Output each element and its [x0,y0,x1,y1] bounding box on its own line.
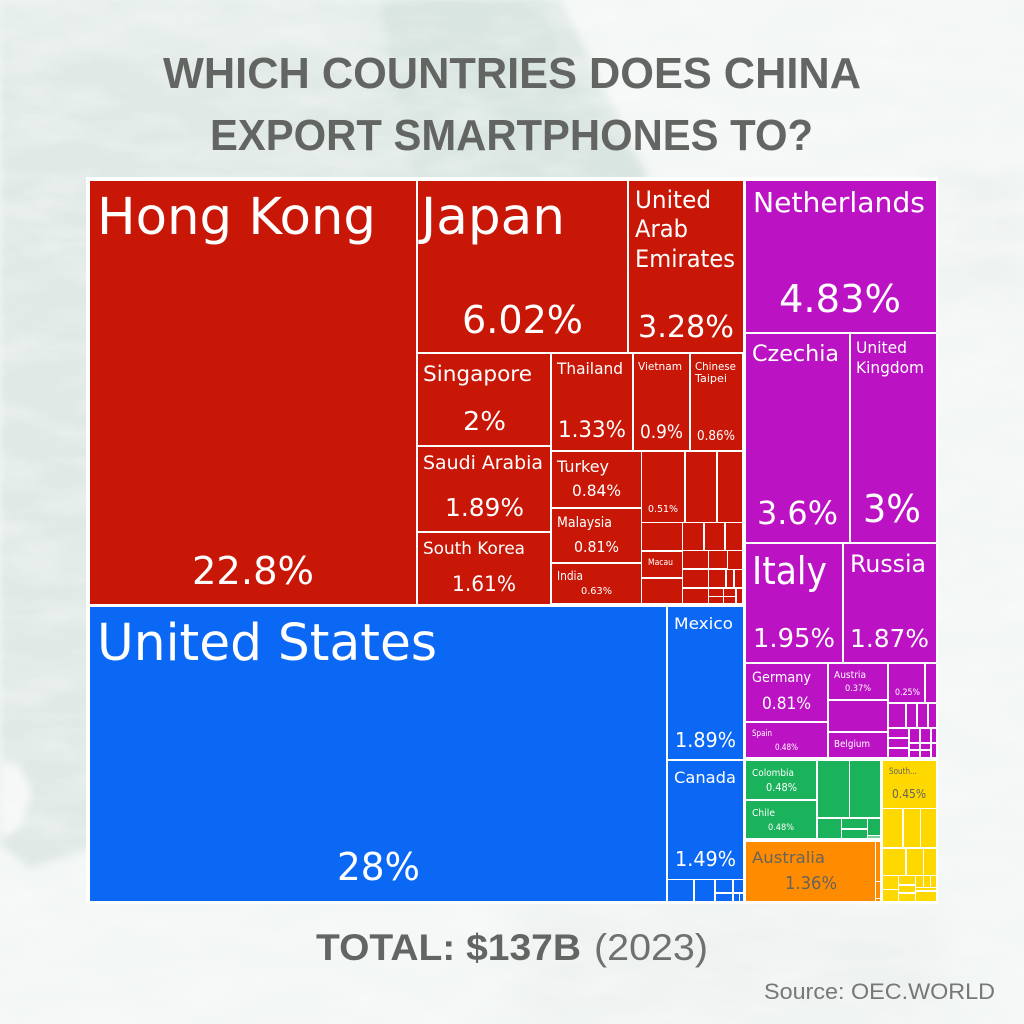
group: South America (green) [746,761,880,838]
cell: Turkey: Turkey [556,457,609,476]
cell: Singapore [418,354,550,445]
group: Africa (yellow) [883,761,936,901]
cell: Italy: Italy [752,549,827,593]
cell: India [552,564,641,603]
cell: Macau: Macau [648,558,673,568]
cell: South Africa: 0.45% [892,787,926,801]
cell: United States [90,607,666,901]
cell: Thailand: Thailand [556,359,623,378]
cell: United Arab Emirates: United [635,186,711,214]
cell: South Korea [418,533,550,604]
cell: Canada: Canada [674,768,736,787]
cell: Netherlands: Netherlands [753,186,925,219]
cell: Hong Kong [90,181,416,604]
cell: India: India [557,569,583,583]
cell: Mexico [668,607,743,759]
cell: South Korea: 1.61% [452,572,516,596]
cell: Thailand: 1.33% [558,418,626,443]
cell: United Kingdom: Kingdom [856,358,924,377]
cell: Netherlands [746,181,936,332]
cell: Germany: 0.81% [762,694,811,714]
cell: Colombia: Colombia [752,768,794,779]
cell: United Arab Emirates: Arab [635,215,688,243]
title: WHICH COUNTRIES DOES CHINA [163,49,861,98]
group: Europe (magenta) [746,181,936,757]
cell: Vietnam [634,354,689,450]
cell: Czechia: 3.6% [757,494,838,532]
cell: Russia: 1.87% [850,624,929,653]
cell: Germany [746,664,827,721]
cell: Mexico: Mexico [674,614,733,633]
cell: Spain [746,723,827,757]
cell: Chinese Taipei: Chinese [695,360,736,373]
cell: Mexico: 1.89% [675,728,736,752]
cell: Hong Kong: Hong Kong [97,188,376,247]
cell: Singapore: 2% [463,407,506,437]
cell: Vietnam: Vietnam [638,360,682,373]
cell: United States: United States [97,614,437,673]
cell: Chinese Taipei: Taipei [694,372,727,385]
cell: Colombia: 0.48% [766,781,797,794]
cell: Canada [668,761,743,879]
title [163,49,861,160]
cell: Japan: 6.02% [462,298,583,342]
cell: Thailand [552,354,632,450]
cell: Russia [844,544,936,662]
cell: Chile: Chile [752,808,775,819]
cell: 0.25% [889,664,924,702]
cell: Chinese Taipei: 0.86% [697,429,735,444]
cell: United Kingdom [851,334,936,542]
cell: Italy [746,544,842,662]
cell: 0.51%: 0.51% [648,504,678,515]
cell: Austria [829,664,887,699]
cell: 0.51% [642,452,684,522]
cell: Turkey: 0.84% [572,481,621,500]
cell: Hong Kong: 22.8% [192,549,314,593]
cell: South Africa: South... [889,767,917,777]
cell: South Korea: South Korea [423,539,525,559]
total label: TOTAL: $137B [316,927,581,968]
cell: Saudi Arabia [418,447,550,531]
cell: Japan [418,181,627,352]
cell: Singapore: Singapore [423,362,532,386]
cell: Austria: Austria [834,670,866,681]
cell: Malaysia: Malaysia [557,515,612,531]
cell: Canada: 1.49% [675,847,736,871]
cell: Russia: Russia [850,550,926,578]
cell: United Arab Emirates: Emirates [635,245,735,273]
cell: Colombia [746,761,816,799]
cell: United States: 28% [337,845,420,889]
cell: 0.25%: 0.25% [895,688,920,698]
cell: Belgium [829,733,887,757]
cell: Chile [746,801,816,838]
cell: United Arab Emirates: 3.28% [638,310,734,345]
cell: Malaysia: 0.81% [574,538,619,556]
total label: (2023) [594,927,708,968]
cell: Saudi Arabia: 1.89% [445,493,524,522]
cell: Australia [746,842,875,901]
cell: Germany: Germany [752,670,811,686]
cell: Belgium: Belgium [834,739,870,750]
cell: Macau [642,552,682,577]
cell: Spain: Spain [752,729,772,739]
cell: Spain: 0.48% [775,743,798,753]
group: Asia (red) [90,181,743,604]
cell: Netherlands: 4.83% [779,277,901,321]
cell: Czechia: Czechia [752,342,839,367]
cell: Italy: 1.95% [753,624,835,654]
source: Source: OEC.WORLD [764,979,995,1004]
group: North America (blue) [90,607,743,901]
cell: Austria: 0.37% [845,684,871,694]
cell: Australia: 1.36% [785,873,837,894]
cell: Chile: 0.48% [768,823,794,833]
cell: Saudi Arabia: Saudi Arabia [423,452,543,474]
cell: Australia: Australia [752,848,825,867]
cell: South Africa [883,761,936,808]
cell: United Arab Emirates [629,181,743,352]
cell: Vietnam: 0.9% [640,421,683,443]
cell: Turkey [552,452,641,507]
group: Oceania (orange) [746,842,880,901]
cell: United Kingdom: United [856,338,907,357]
cell: United Kingdom: 3% [863,487,921,531]
treemap panel [86,177,938,904]
cell: Malaysia [552,509,641,562]
cell: India: 0.63% [581,586,612,597]
cell: Japan: Japan [418,188,565,247]
cell: Chinese Taipei [691,354,742,450]
total label [316,927,708,968]
title: EXPORT SMARTPHONES TO? [210,111,813,160]
cell: Czechia [746,334,849,542]
